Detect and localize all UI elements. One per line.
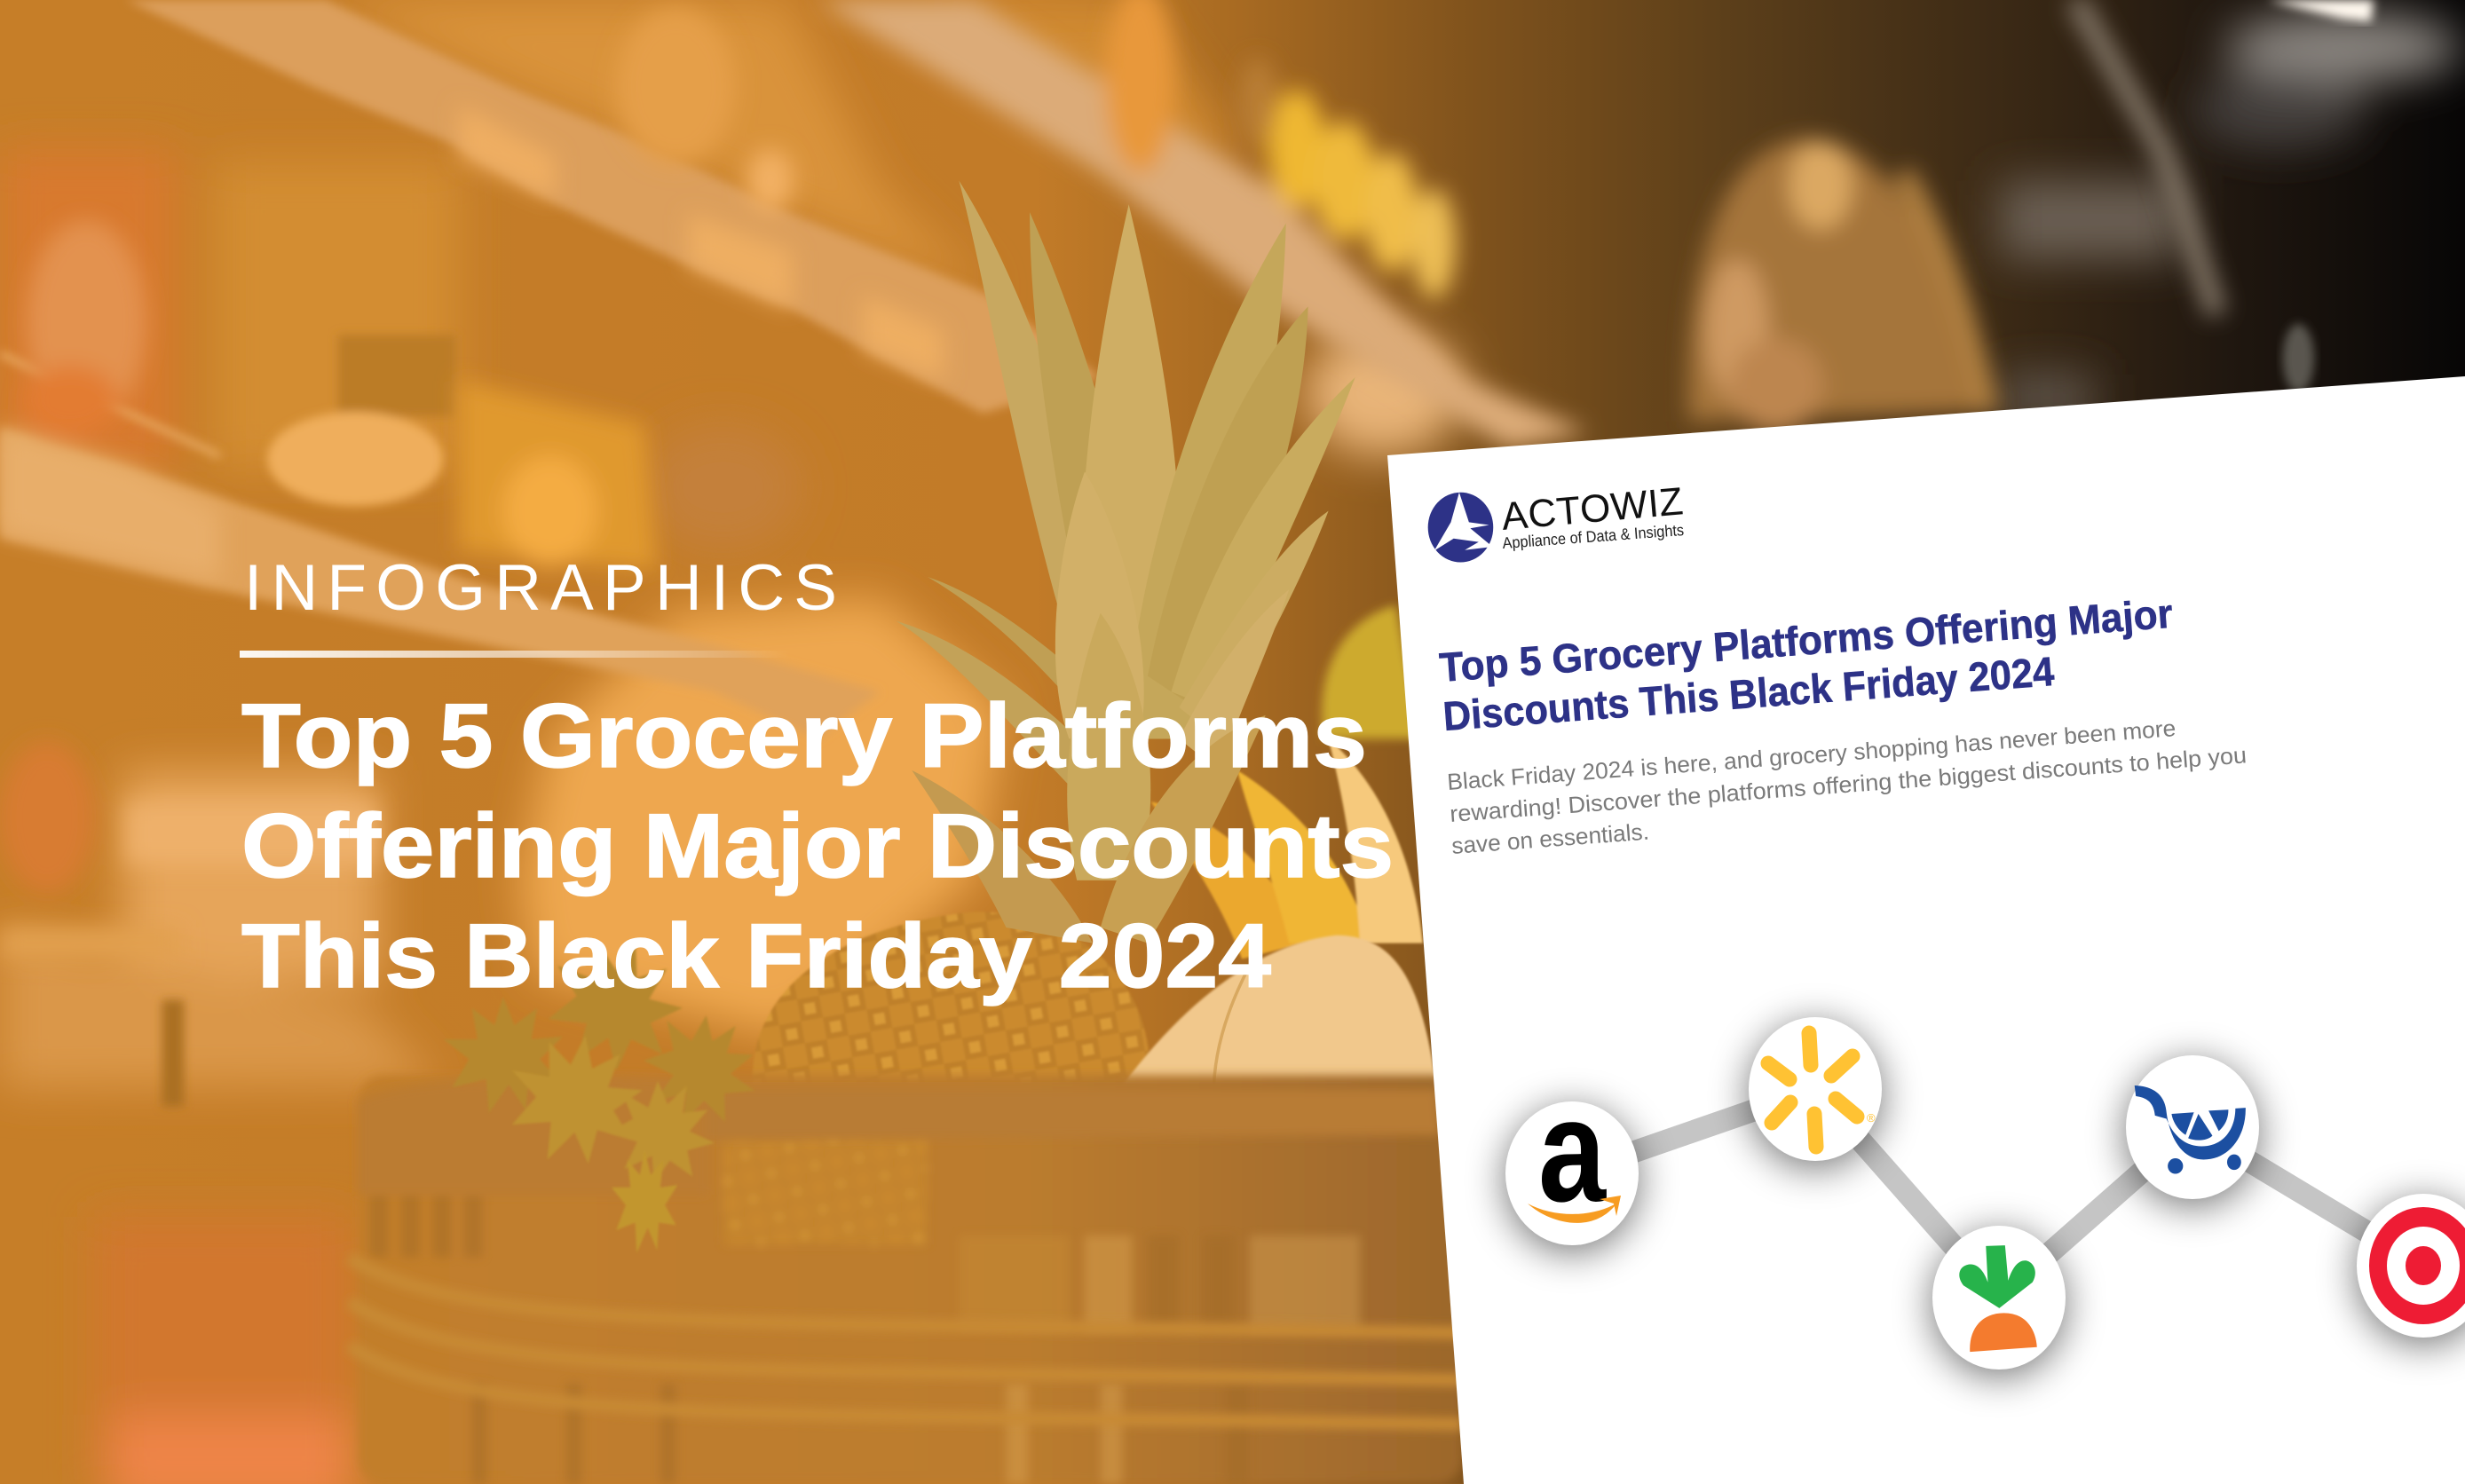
panel description: Black Friday 2024 is here, and grocery shopping has never been more [1446, 714, 2177, 795]
node: Amazon [1505, 1069, 1639, 1245]
icon: Actowiz A emblem [1428, 493, 1493, 563]
brand name: ACTOWIZ [1500, 479, 1685, 539]
heading: main title [241, 685, 1394, 1006]
text block: infographics label and main title [240, 552, 1394, 1006]
node: Target [2357, 1194, 2465, 1338]
logo: Actowiz [1428, 479, 1685, 563]
panel description: rewarding! Discover the platforms offering the biggest discounts to help you [1449, 741, 2248, 827]
panel heading [1438, 590, 2175, 739]
panel description [1446, 714, 2248, 859]
node: Instacart [1932, 1226, 2066, 1370]
panel heading: Top 5 Grocery Platforms Offering Major [1438, 590, 2175, 691]
tagline: Appliance of Data & Insights [1502, 521, 1685, 552]
node: FreshDirect-style cart [2126, 1055, 2259, 1199]
fading divider rule [240, 651, 790, 658]
chart: connected platform logos [1505, 1017, 2465, 1377]
panel heading: Discounts This Black Friday 2024 [1442, 648, 2056, 739]
node: Walmart: ® [1867, 1111, 1876, 1125]
node: Amazon: a [1538, 1069, 1607, 1232]
heading: main title: Offering Major Discounts [241, 795, 1394, 896]
panel: tilted white report page [1387, 376, 2465, 1484]
heading: main title: This Black Friday 2024 [241, 905, 1271, 1006]
heading: main title: Top 5 Grocery Platforms [241, 685, 1367, 786]
panel description: save on essentials. [1450, 818, 1650, 859]
connector lines [1572, 1089, 2423, 1298]
node: Walmart [1749, 1017, 1882, 1161]
node shadows [1505, 1024, 2465, 1377]
label: INFOGRAPHICS: INFOGRAPHICS [244, 552, 837, 624]
